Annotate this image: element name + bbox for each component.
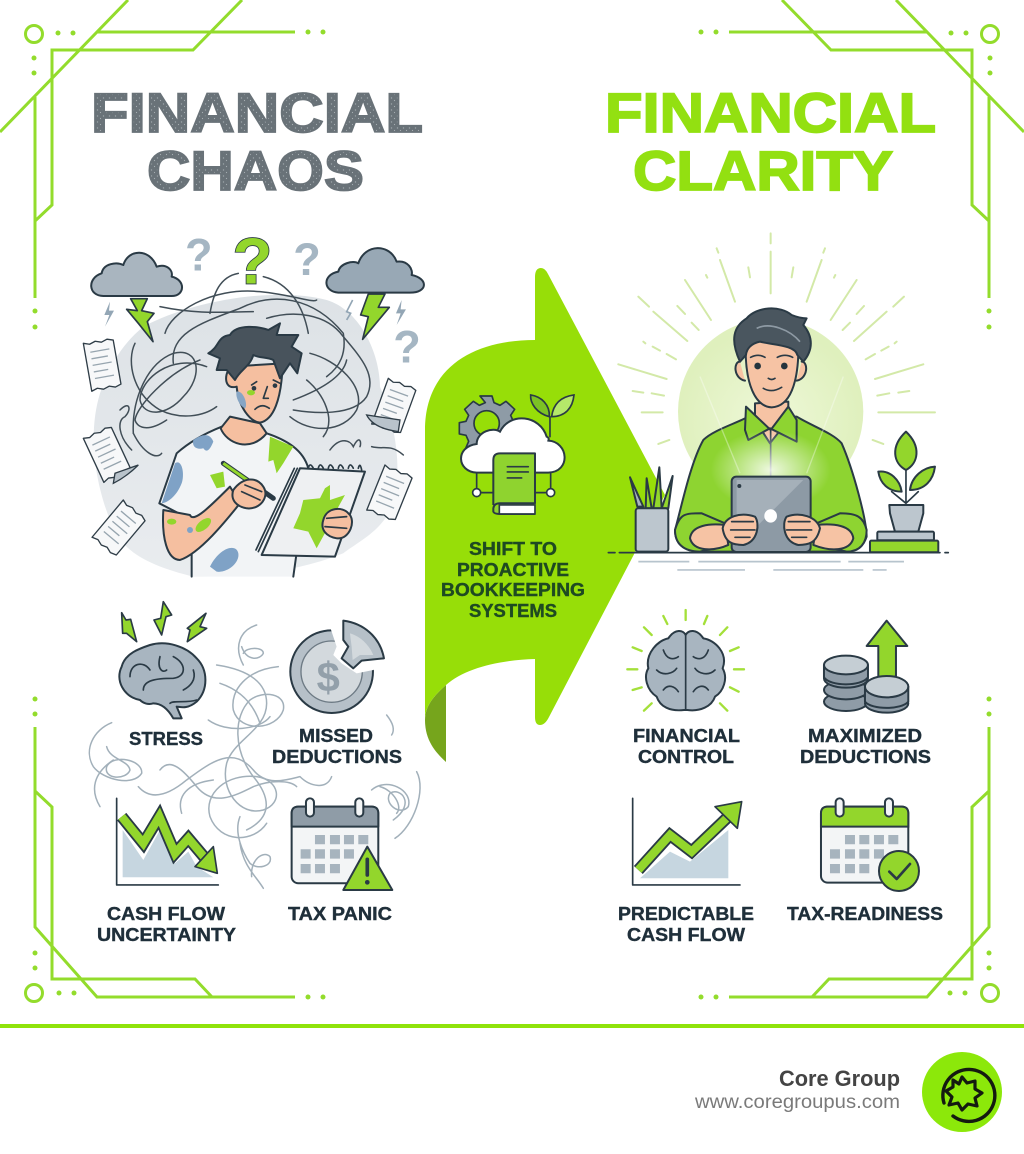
frame: top-left corner — [0, 0, 326, 330]
icon: stress brain — [119, 602, 207, 718]
chaos labels: UNCERTAINTY — [97, 924, 237, 945]
arrow label: SHIFT TO — [469, 539, 557, 559]
left stress scribbles — [89, 625, 420, 888]
person — [159, 323, 365, 577]
pencil cup — [630, 467, 673, 552]
question marks — [185, 224, 421, 373]
question marks: ? — [293, 234, 321, 285]
plant on books — [870, 432, 938, 552]
chaos labels: CASH FLOW — [107, 903, 226, 924]
storm clouds — [91, 248, 424, 342]
title: Financial Clarity: CLARITY — [633, 139, 893, 202]
chaos labels: STRESS — [129, 728, 203, 749]
icon: calm brain with rays — [627, 610, 744, 711]
footer divider — [0, 1024, 1024, 1028]
icon: cloud, gear, book and sprout — [459, 395, 574, 514]
arrow label: BOOKKEEPING — [441, 580, 585, 600]
illustration: stressed person in chaos — [83, 224, 424, 577]
chaos labels: MISSED — [299, 725, 373, 746]
clarity labels: DEDUCTIONS — [800, 746, 931, 767]
table line and shadows — [608, 553, 948, 570]
clarity labels — [618, 725, 943, 945]
icon: tax readiness calendar — [821, 798, 919, 891]
person — [675, 308, 867, 552]
clarity labels: TAX-READINESS — [787, 903, 943, 924]
footer: logo — [922, 1052, 1002, 1132]
footer: brand text: Core Group — [779, 1066, 900, 1091]
transition arrow — [425, 268, 665, 762]
clarity labels: CASH FLOW — [627, 924, 746, 945]
icon: coin stacks with arrow — [824, 621, 908, 713]
frame: bottom-right corner — [698, 696, 998, 1002]
footer: brand text: www.coregroupus.com — [694, 1092, 900, 1113]
icon: tax panic calendar — [292, 798, 392, 890]
title: Financial Chaos — [91, 81, 423, 202]
frame: top-right corner — [698, 0, 1024, 330]
shirt stains — [193, 435, 213, 451]
clarity labels: CONTROL — [638, 746, 734, 767]
receipts — [83, 338, 416, 557]
illustration: calm person with tablet — [608, 233, 948, 570]
arm — [163, 487, 240, 560]
icon: falling cash flow chart — [117, 798, 218, 885]
frame: bottom-left corner — [26, 696, 326, 1002]
chaos labels: TAX PANIC — [288, 903, 392, 924]
icon: rising cash flow chart — [633, 798, 742, 885]
title: Financial Chaos: FINANCIAL — [91, 81, 423, 144]
sun rays — [618, 233, 935, 444]
arrow label: PROACTIVE — [457, 560, 569, 580]
scribbles — [120, 273, 403, 456]
title: Financial Clarity: FINANCIAL — [605, 81, 936, 144]
background cloud blob — [94, 295, 397, 577]
question marks: ? — [393, 322, 421, 373]
title: Financial Chaos: CHAOS — [147, 139, 364, 202]
chaos labels: DEDUCTIONS — [272, 746, 402, 767]
arrow label: SYSTEMS — [469, 601, 557, 621]
clarity labels: PREDICTABLE — [618, 903, 754, 924]
arrow label — [441, 539, 585, 621]
notepad — [262, 468, 365, 557]
clarity labels: FINANCIAL — [633, 725, 740, 746]
tablet — [732, 477, 811, 552]
question marks: ? — [185, 230, 212, 281]
icon: broken coin — [290, 613, 390, 713]
icon: broken coin: $ — [317, 654, 340, 701]
title: Financial Clarity — [605, 81, 936, 202]
footer: brand text — [694, 1066, 900, 1113]
sun glow — [678, 319, 863, 504]
chaos labels — [97, 725, 402, 945]
clarity labels: MAXIMIZED — [808, 725, 922, 746]
question marks: ? — [233, 224, 272, 297]
